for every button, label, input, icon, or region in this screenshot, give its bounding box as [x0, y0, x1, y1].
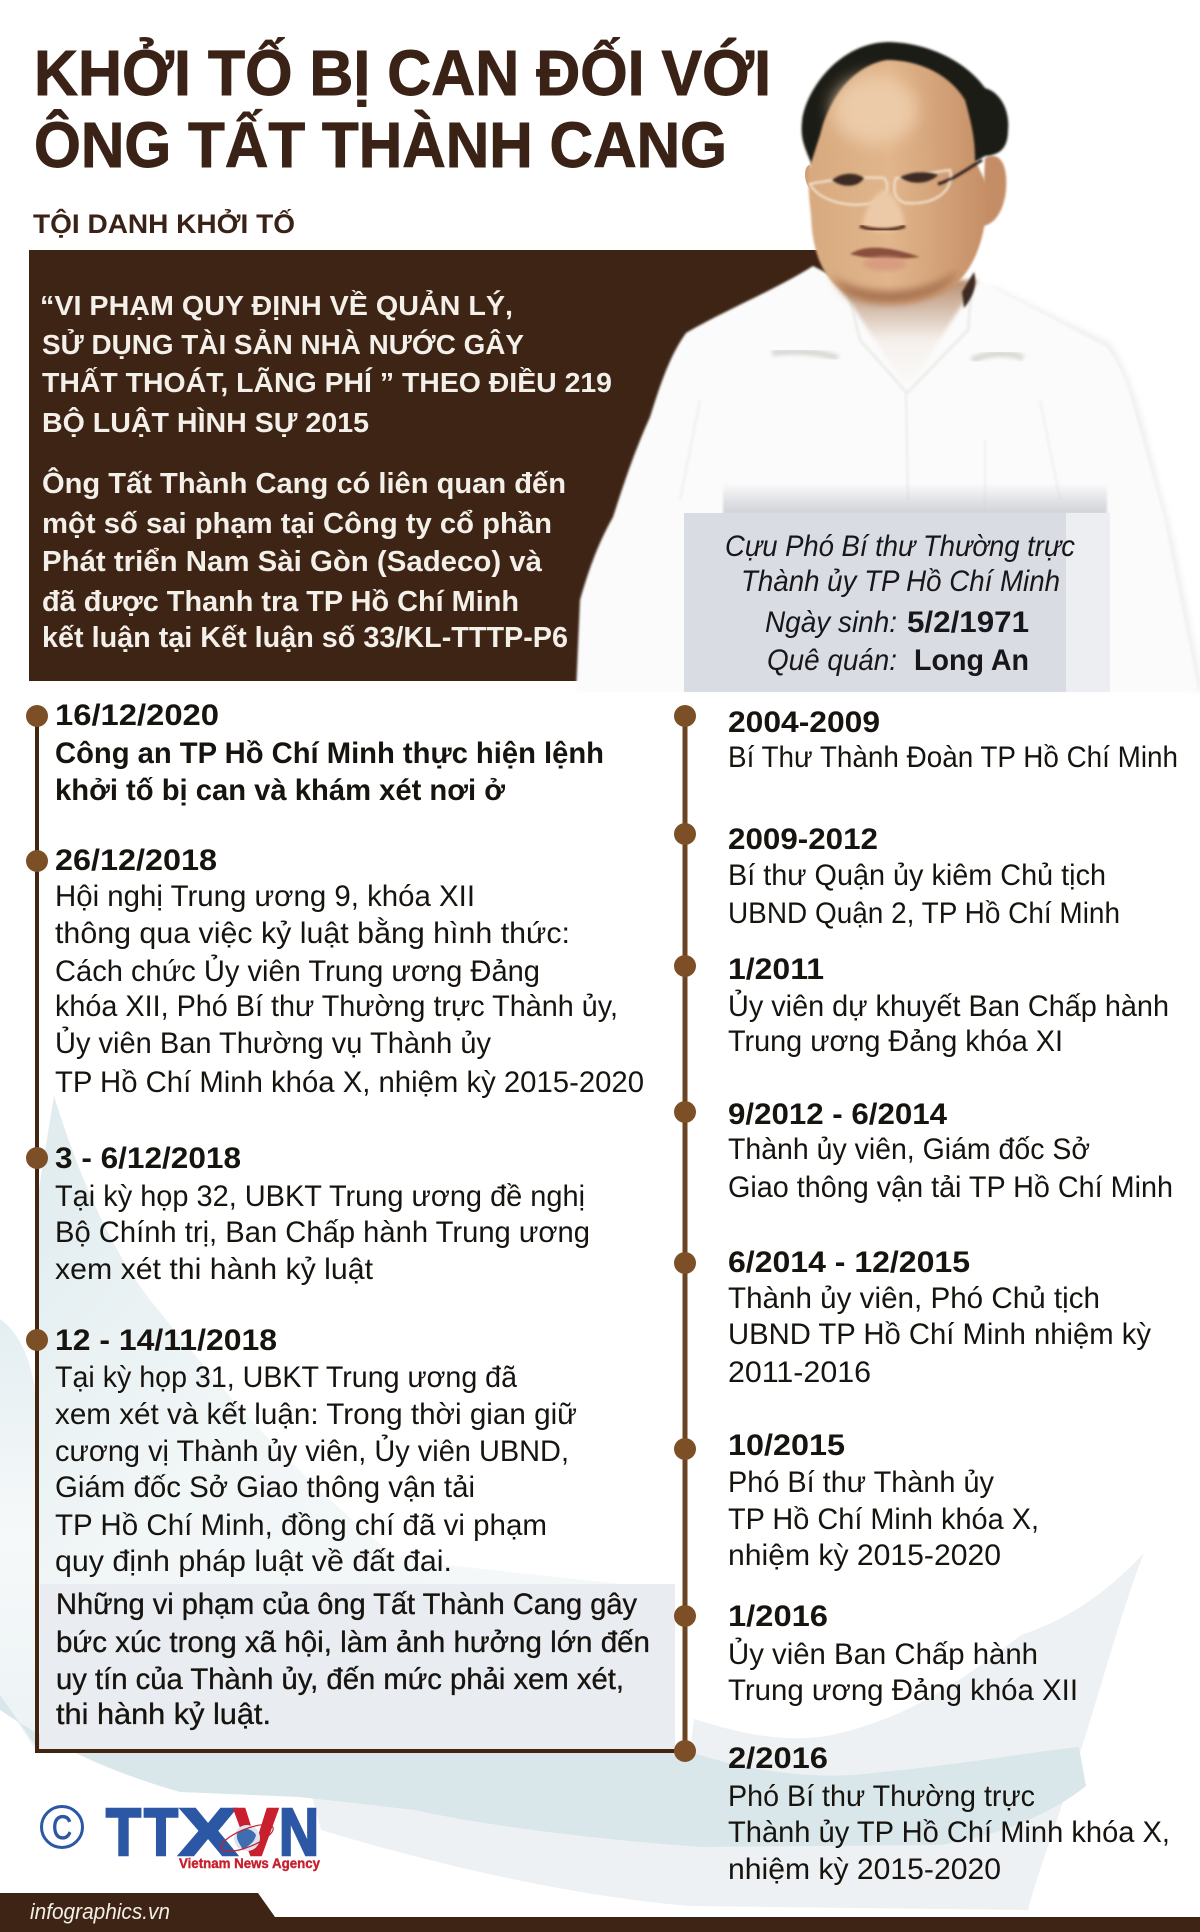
forehead highlight — [833, 76, 917, 144]
shirt folds — [680, 283, 1060, 520]
career: 6/2014 - 12/2015: Thành ủy viên, Phó Chủ tịch — [728, 1282, 1100, 1315]
career: 9/2012 - 6/2014: 9/2012 - 6/2014 — [728, 1098, 947, 1131]
profile text: Long An — [914, 644, 1029, 677]
event: 26/12/2018: Ủy viên Ban Thường vụ Thành ủy — [55, 1026, 491, 1060]
event: 16/12/2020: 16/12/2020 — [55, 699, 219, 732]
title: KHỞI TỐ BỊ CAN ĐỐI VỚI — [34, 36, 771, 109]
timeline dots: left column — [26, 705, 48, 1351]
shirt shadow — [990, 290, 1198, 690]
profile text — [725, 530, 1075, 677]
charge explanation: kết luận tại Kết luận số 33/KL-TTTP-P6 — [42, 622, 568, 654]
footer bar — [0, 1893, 1200, 1932]
career: 6/2014 - 12/2015: UBND TP Hồ Chí Minh nhiệm kỳ — [728, 1318, 1151, 1351]
profile text: 5/2/1971 — [907, 606, 1029, 639]
note text: Những vi phạm của ông Tất Thành Cang gây — [56, 1588, 637, 1621]
event: 16/12/2020: Công an TP Hồ Chí Minh thực hiện lệnh — [55, 737, 604, 770]
career: 2/2016: 2/2016 — [728, 1742, 828, 1775]
career: 10/2015: nhiệm kỳ 2015-2020 — [728, 1539, 1001, 1572]
career: 9/2012 - 6/2014 — [728, 1098, 1173, 1204]
event: 26/12/2018: khóa XII, Phó Bí thư Thường trực Thành ủy, — [55, 990, 618, 1023]
title: ÔNG TẤT THÀNH CANG — [34, 108, 727, 181]
portrait: man in white shirt — [576, 42, 1198, 692]
footer bar: infographics.vn — [30, 1899, 170, 1924]
event: 3 - 6/12/2018: 3 - 6/12/2018 — [55, 1142, 241, 1175]
charge explanation: Phát triển Nam Sài Gòn (Sadeco) và — [42, 546, 543, 578]
career: 2/2016 — [728, 1742, 1170, 1886]
logo: TTXVN: X — [179, 1795, 237, 1870]
shirt — [576, 266, 1197, 692]
career: 10/2015 — [728, 1429, 1039, 1572]
career: 2009-2012: Bí thư Quận ủy kiêm Chủ tịch — [728, 859, 1106, 892]
charge quote: “VI PHẠM QUY ĐỊNH VỀ QUẢN LÝ, — [40, 289, 513, 321]
note text: thi hành kỷ luật. — [56, 1698, 271, 1731]
eyes — [832, 174, 864, 186]
icon: copyright mark: C — [52, 1809, 72, 1847]
career: 2004-2009: 2004-2009 — [728, 706, 880, 739]
career: 2009-2012: UBND Quận 2, TP Hồ Chí Minh — [728, 897, 1120, 930]
panel: charge description — [29, 250, 830, 681]
career: 6/2014 - 12/2015 — [728, 1246, 1151, 1389]
note box: highlighted violations — [40, 1584, 675, 1750]
profile text: Ngày sinh: — [765, 606, 897, 639]
event: 26/12/2018: Cách chức Ủy viên Trung ương Đảng — [55, 954, 540, 988]
ear — [982, 156, 1006, 226]
event: 12 - 14/11/2018: quy định pháp luật về đất đai. — [55, 1545, 452, 1578]
note text: bức xúc trong xã hội, làm ảnh hưởng lớn đến — [56, 1626, 650, 1659]
event: 12 - 14/11/2018: 12 - 14/11/2018 — [55, 1324, 277, 1357]
note text — [56, 1588, 650, 1731]
nose — [862, 190, 905, 232]
globe — [218, 1819, 276, 1857]
event: 12 - 14/11/2018: TP Hồ Chí Minh, đồng chí đã vi phạm — [55, 1509, 547, 1542]
logo: TTXVN: T — [144, 1795, 178, 1870]
event: 3 - 6/12/2018: Bộ Chính trị, Ban Chấp hành Trung ương — [55, 1216, 590, 1249]
career: 6/2014 - 12/2015: 2011-2016 — [728, 1356, 871, 1389]
career: 2004-2009 — [728, 706, 1178, 774]
timeline frame — [37, 716, 685, 1751]
event: 3 - 6/12/2018: xem xét thi hành kỷ luật — [55, 1253, 374, 1286]
logo: TTXVN: Vietnam News Agency — [179, 1855, 320, 1871]
event: 12 - 14/11/2018: xem xét và kết luận: Trong thời gian giữ — [55, 1398, 577, 1431]
charge explanation — [42, 466, 568, 654]
charge quote — [40, 289, 612, 438]
logo: TTXVN — [106, 1795, 320, 1871]
career: 1/2011: Ủy viên dự khuyết Ban Chấp hành — [728, 989, 1169, 1023]
career: 2004-2009: Bí Thư Thành Đoàn TP Hồ Chí Minh — [728, 741, 1178, 774]
event: 3 - 6/12/2018: Tại kỳ họp 32, UBKT Trung ương đề nghị — [55, 1180, 585, 1213]
event: 12 - 14/11/2018 — [55, 1324, 577, 1578]
career: 2/2016: Thành ủy TP Hồ Chí Minh khóa X, — [728, 1816, 1170, 1849]
heading: charge: TỘI DANH KHỞI TỐ — [33, 207, 295, 239]
profile text: Quê quán: — [767, 644, 897, 677]
logo: TTXVN: N — [279, 1795, 319, 1870]
career: 1/2011 — [728, 953, 1169, 1058]
event: 26/12/2018: Hội nghị Trung ương 9, khóa XII — [55, 880, 475, 913]
neck — [836, 280, 978, 390]
career: 1/2011: 1/2011 — [728, 953, 824, 986]
career: 10/2015: TP Hồ Chí Minh khóa X, — [728, 1503, 1039, 1536]
career: 2009-2012 — [728, 823, 1120, 930]
title — [34, 36, 771, 181]
career: 10/2015: 10/2015 — [728, 1429, 845, 1462]
timeline dots: right column — [674, 705, 696, 1762]
charge explanation: Ông Tất Thành Cang có liên quan đến — [42, 466, 566, 500]
career: 2/2016: Phó Bí thư Thường trực — [728, 1780, 1035, 1813]
caption: shading above box — [723, 483, 1107, 514]
event: 26/12/2018: 26/12/2018 — [55, 844, 217, 877]
icon: copyright mark — [42, 1806, 82, 1848]
event: 16/12/2020 — [55, 699, 604, 807]
profile text: Cựu Phó Bí thư Thường trực — [725, 530, 1075, 563]
caption box: profile — [684, 513, 1110, 692]
charge explanation: một số sai phạm tại Công ty cổ phần — [42, 508, 552, 540]
mouth — [850, 248, 920, 259]
career: 1/2016 — [728, 1600, 1078, 1707]
charge explanation: đã được Thanh tra TP Hồ Chí Minh — [42, 586, 519, 618]
logo: TTXVN: V — [234, 1795, 278, 1870]
event: 26/12/2018 — [55, 844, 644, 1099]
career: 1/2016: Trung ương Đảng khóa XII — [728, 1674, 1078, 1707]
event: 26/12/2018: thông qua việc kỷ luật bằng hình thức: — [55, 917, 570, 950]
career: 1/2016: Ủy viên Ban Chấp hành — [728, 1637, 1038, 1671]
career: 9/2012 - 6/2014: Giao thông vận tải TP Hồ Chí Minh — [728, 1171, 1173, 1204]
profile text: Thành ủy TP Hồ Chí Minh — [741, 565, 1060, 598]
collar shadows — [772, 352, 838, 358]
event: 16/12/2020: khởi tố bị can và khám xét nơi ở — [55, 774, 506, 807]
glasses — [810, 160, 982, 205]
career: 6/2014 - 12/2015: 6/2014 - 12/2015 — [728, 1246, 970, 1279]
event: 3 - 6/12/2018 — [55, 1142, 590, 1286]
event: 12 - 14/11/2018: Tại kỳ họp 31, UBKT Trung ương đã — [55, 1361, 517, 1394]
logo: TTXVN: T — [106, 1795, 141, 1870]
career: 1/2011: Trung ương Đảng khóa XI — [728, 1025, 1063, 1058]
career: 10/2015: Phó Bí thư Thành ủy — [728, 1466, 994, 1499]
face — [808, 60, 987, 305]
charge quote: THẤT THOÁT, LÃNG PHÍ ” THEO ĐIỀU 219 — [42, 367, 612, 398]
neck shadow — [962, 272, 975, 308]
career: 1/2016: 1/2016 — [728, 1600, 828, 1633]
note text: uy tín của Thành ủy, đến mức phải xem xét, — [56, 1663, 624, 1696]
charge quote: BỘ LUẬT HÌNH SỰ 2015 — [42, 406, 369, 438]
event: 12 - 14/11/2018: cương vị Thành ủy viên, Ủy viên UBND, — [55, 1434, 569, 1468]
hair — [802, 42, 1008, 165]
event: 26/12/2018: TP Hồ Chí Minh khóa X, nhiệm kỳ 2015-2020 — [55, 1066, 644, 1099]
jaw shading — [830, 270, 958, 304]
event: 12 - 14/11/2018: Giám đốc Sở Giao thông vận tải — [55, 1471, 475, 1504]
career: 2/2016: nhiệm kỳ 2015-2020 — [728, 1853, 1001, 1886]
charge quote: SỬ DỤNG TÀI SẢN NHÀ NƯỚC GÂY — [42, 328, 524, 360]
career: 9/2012 - 6/2014: Thành ủy viên, Giám đốc Sở — [728, 1133, 1090, 1166]
career: 2009-2012: 2009-2012 — [728, 823, 878, 856]
